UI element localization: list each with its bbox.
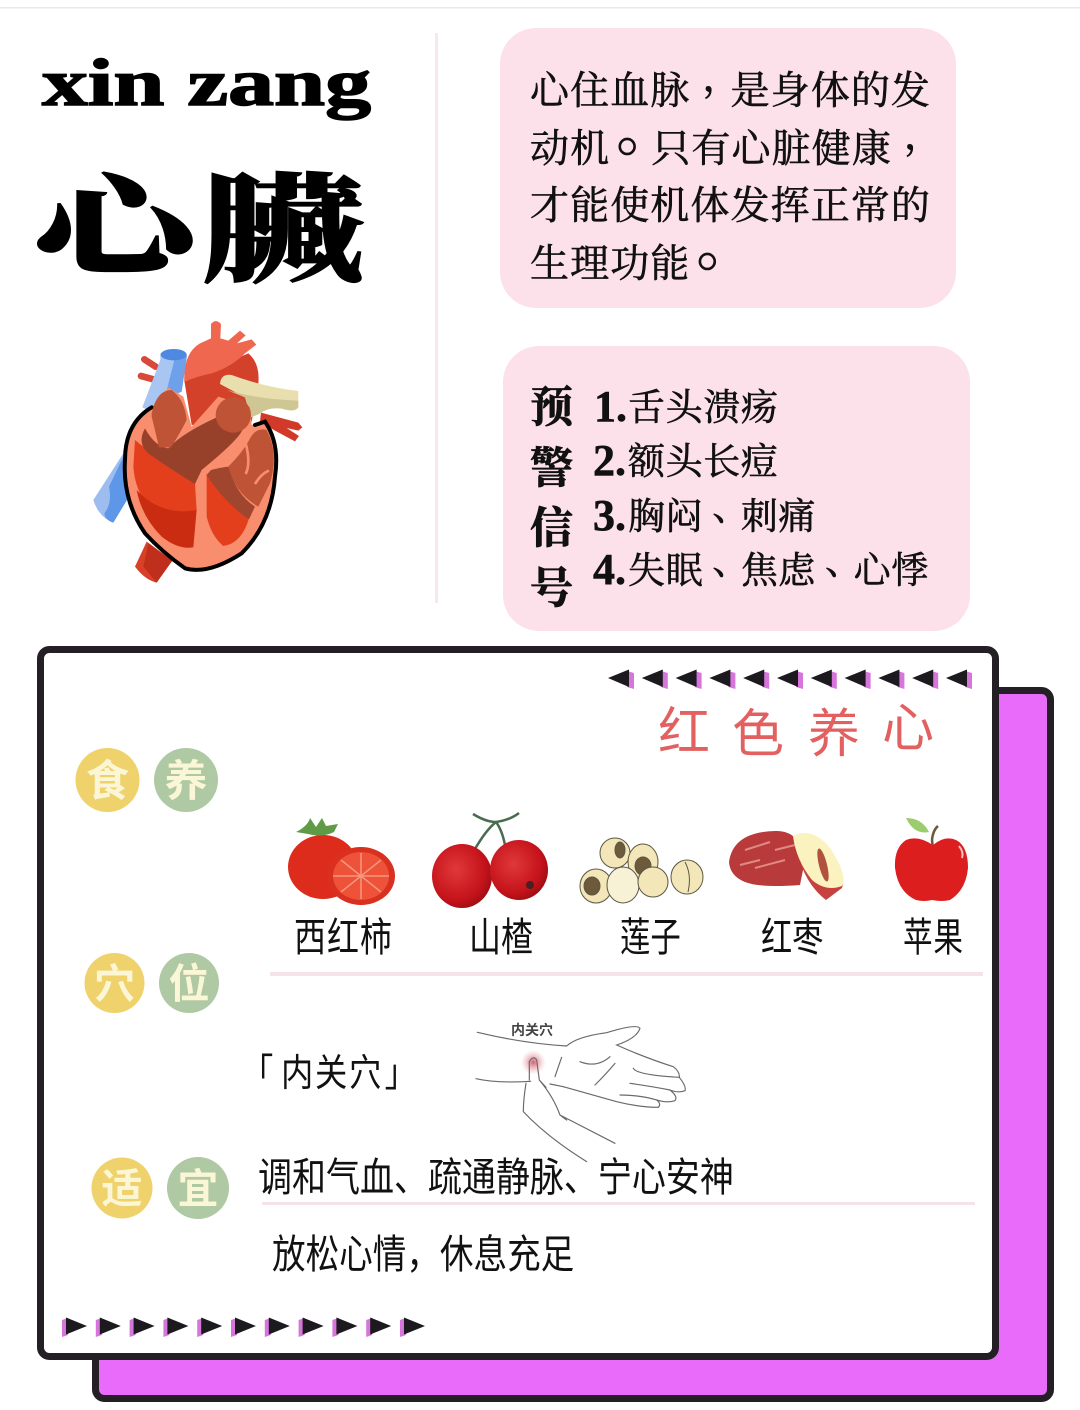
icon: red jujube [729, 831, 844, 900]
title: chinese [34, 135, 364, 306]
panel: intro text [500, 28, 956, 308]
heading: warning signs [530, 384, 575, 613]
badge: food therapy: 食 [86, 758, 129, 806]
food labels [294, 915, 964, 960]
title: pinyin: xin zang [42, 46, 371, 120]
heading: warning signs: 号 [530, 566, 573, 613]
panel: intro text: ， [702, 57, 743, 100]
panel: warning signs [503, 346, 970, 631]
panel: main white card [40, 650, 996, 1356]
heading: red foods nourish the heart: 色 [732, 706, 784, 764]
panel: intro text: 是身体的发 [731, 70, 931, 113]
food labels: 红枣 [761, 915, 823, 960]
panel: intro text: 才能使机体发挥正常的 [530, 185, 931, 228]
food labels: 苹果 [903, 916, 964, 960]
panel: intro text: 心住血脉 [530, 70, 690, 113]
icon: lotus seeds [580, 838, 703, 903]
food labels: 山楂 [469, 915, 533, 960]
heading: red foods nourish the heart [658, 700, 934, 764]
food labels: 西红柿 [294, 915, 393, 960]
list: symptoms: 、 [825, 542, 863, 583]
panel: intro text: 动机 [530, 128, 610, 171]
panel: intro text: 。 [696, 212, 758, 278]
panel: intro text: 。 [616, 97, 677, 163]
list: symptoms: 心悸 [854, 550, 929, 592]
list: symptoms: 刺痛 [741, 496, 816, 538]
food labels: 莲子 [620, 915, 681, 960]
list: symptoms: 3. [593, 491, 626, 540]
heading: red foods nourish the heart: 红 [658, 704, 710, 762]
badge: suitable [92, 1157, 229, 1219]
heading: red foods nourish the heart: 养 [808, 706, 860, 764]
heading: warning signs: 警 [530, 445, 573, 493]
panel: intro text: 只有心脏健康 [651, 128, 892, 171]
badge: suitable: 适 [102, 1166, 142, 1212]
list: symptoms: 舌头溃疡 [628, 387, 778, 429]
text: benefits: 调和气血、疏通静脉、宁心安神 [258, 1154, 734, 1200]
badge: acupoint: 穴 [94, 961, 135, 1007]
list: symptoms: 失眠 [628, 542, 929, 592]
icon: apple [895, 818, 968, 901]
badge: suitable: 宜 [178, 1166, 218, 1212]
list: symptoms: 2. [593, 436, 626, 485]
heading: warning signs: 信 [530, 505, 573, 553]
badge: food therapy: 养 [164, 758, 208, 806]
panel: intro text: 生理功能 [530, 243, 690, 286]
badge: acupoint: 位 [168, 961, 210, 1007]
arrows: top row [608, 670, 972, 689]
list: symptoms: 额头长痘 [628, 441, 778, 483]
panel: intro text: ， [904, 115, 944, 158]
list: symptoms: 、 [712, 542, 750, 583]
list: symptoms: 、 [712, 488, 750, 529]
icon: tomato [288, 818, 395, 905]
arrows: bottom row [62, 1318, 425, 1337]
badge: food therapy [76, 748, 218, 812]
icon: heart anatomy [93, 321, 302, 583]
list: symptoms: 4. [593, 545, 626, 594]
list: symptoms: 胸闷 [628, 488, 816, 538]
list: symptoms: 1. [594, 382, 627, 431]
list: symptoms [593, 382, 929, 594]
list: symptoms: 焦虑 [741, 550, 816, 592]
heading: red foods nourish the heart: 心 [882, 700, 934, 758]
acupoint name: 「内关穴」 [241, 1053, 417, 1095]
illustration: neiguan acupoint on wrist: 内关穴 [511, 1022, 553, 1038]
heading: warning signs: 预 [530, 384, 575, 432]
badge: acupoint [84, 953, 219, 1013]
panel: back magenta card [96, 690, 1050, 1398]
illustration: neiguan acupoint on wrist [476, 1022, 685, 1162]
icon: hawthorn [432, 813, 548, 908]
text: advice: 放松心情，休息充足 [272, 1232, 574, 1277]
title: chinese: 臟 [202, 135, 364, 306]
title: chinese: 心 [34, 138, 219, 298]
